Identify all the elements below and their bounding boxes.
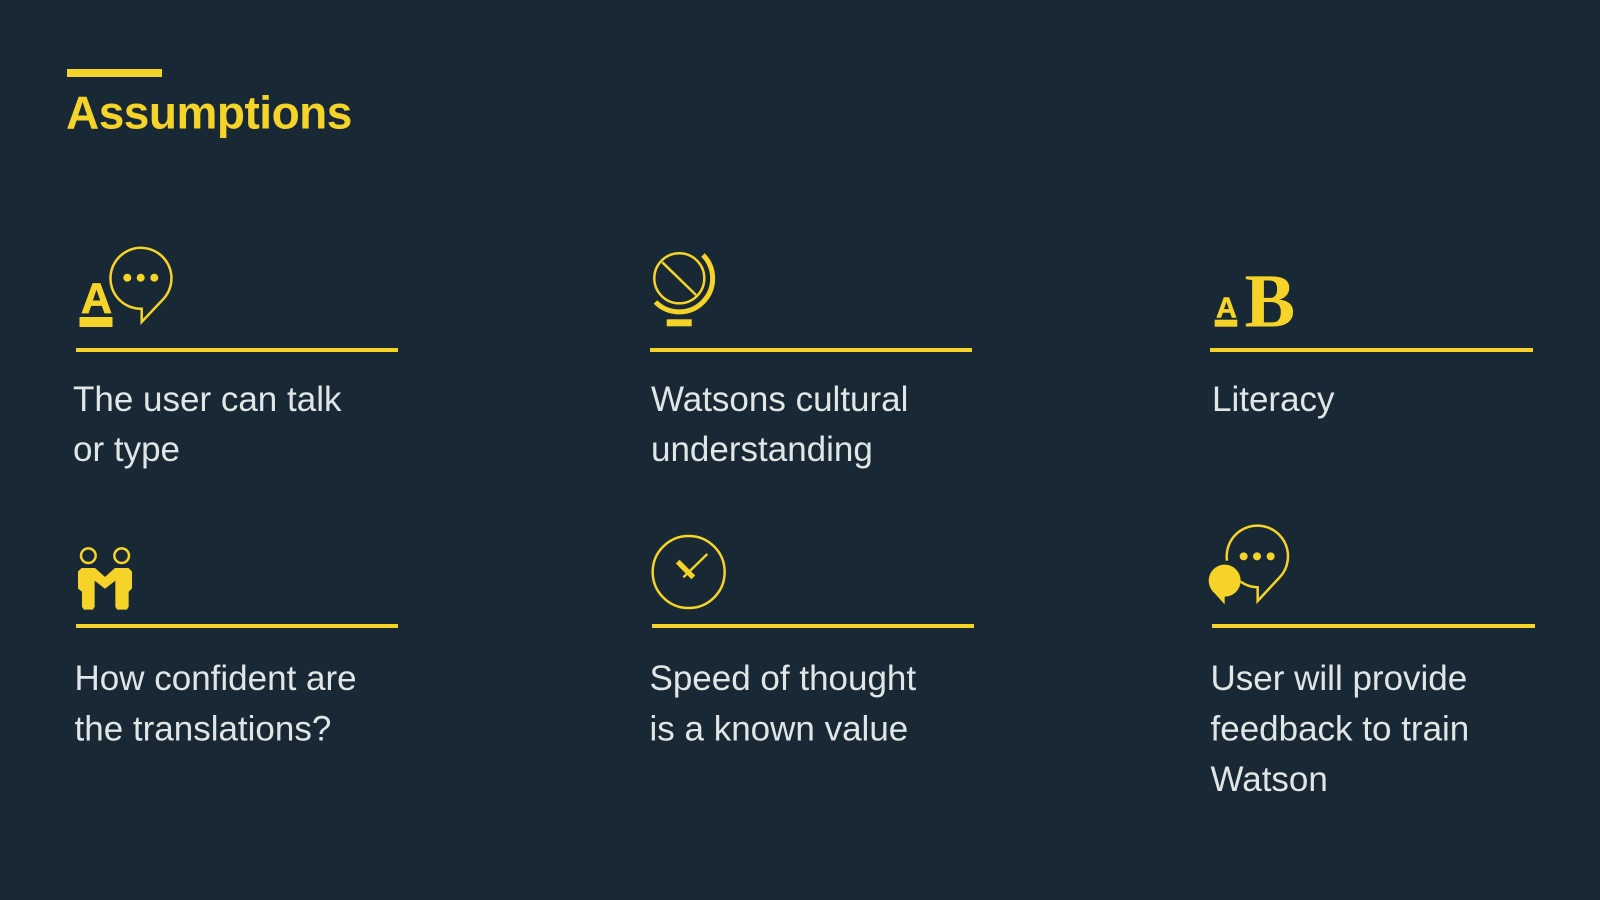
panel: literacy xyxy=(1210,260,1533,419)
icon: small A and large B xyxy=(1215,260,1295,344)
text: user feedback: Watson xyxy=(1210,760,1328,799)
panel: translation confidence xyxy=(74,548,398,748)
panel: talk or type xyxy=(73,248,398,469)
text: speed of thought: Speed of thought xyxy=(650,659,916,698)
icon: clock xyxy=(653,536,725,608)
icon: small A and large B: A xyxy=(1216,292,1237,324)
icon: letter A and speech bubble xyxy=(80,248,171,327)
panel: user feedback xyxy=(1209,526,1535,799)
title block: Assumptions xyxy=(66,86,352,138)
icon: letter A and speech bubble: A xyxy=(81,275,112,323)
text: cultural understanding: understanding xyxy=(651,430,873,469)
icon: small A and large B: B xyxy=(1244,260,1295,344)
icon: globe xyxy=(654,253,713,326)
icon: two speech bubbles xyxy=(1209,526,1288,604)
text: user feedback: feedback to train xyxy=(1210,710,1469,748)
text: translation confidence: the translations? xyxy=(74,710,331,748)
text: cultural understanding: Watsons cultural xyxy=(651,380,908,419)
text: speed of thought: is a known value xyxy=(650,710,908,748)
text: user feedback: User will provide xyxy=(1210,659,1467,698)
panel: cultural understanding xyxy=(650,253,972,469)
text: talk or type: or type xyxy=(73,430,180,469)
panel: speed of thought xyxy=(650,536,974,748)
text: translation confidence: How confident are xyxy=(74,659,357,698)
text: literacy: Literacy xyxy=(1212,380,1335,419)
icon: two people shaking hands xyxy=(78,548,132,609)
text: talk or type: The user can talk xyxy=(73,380,342,419)
